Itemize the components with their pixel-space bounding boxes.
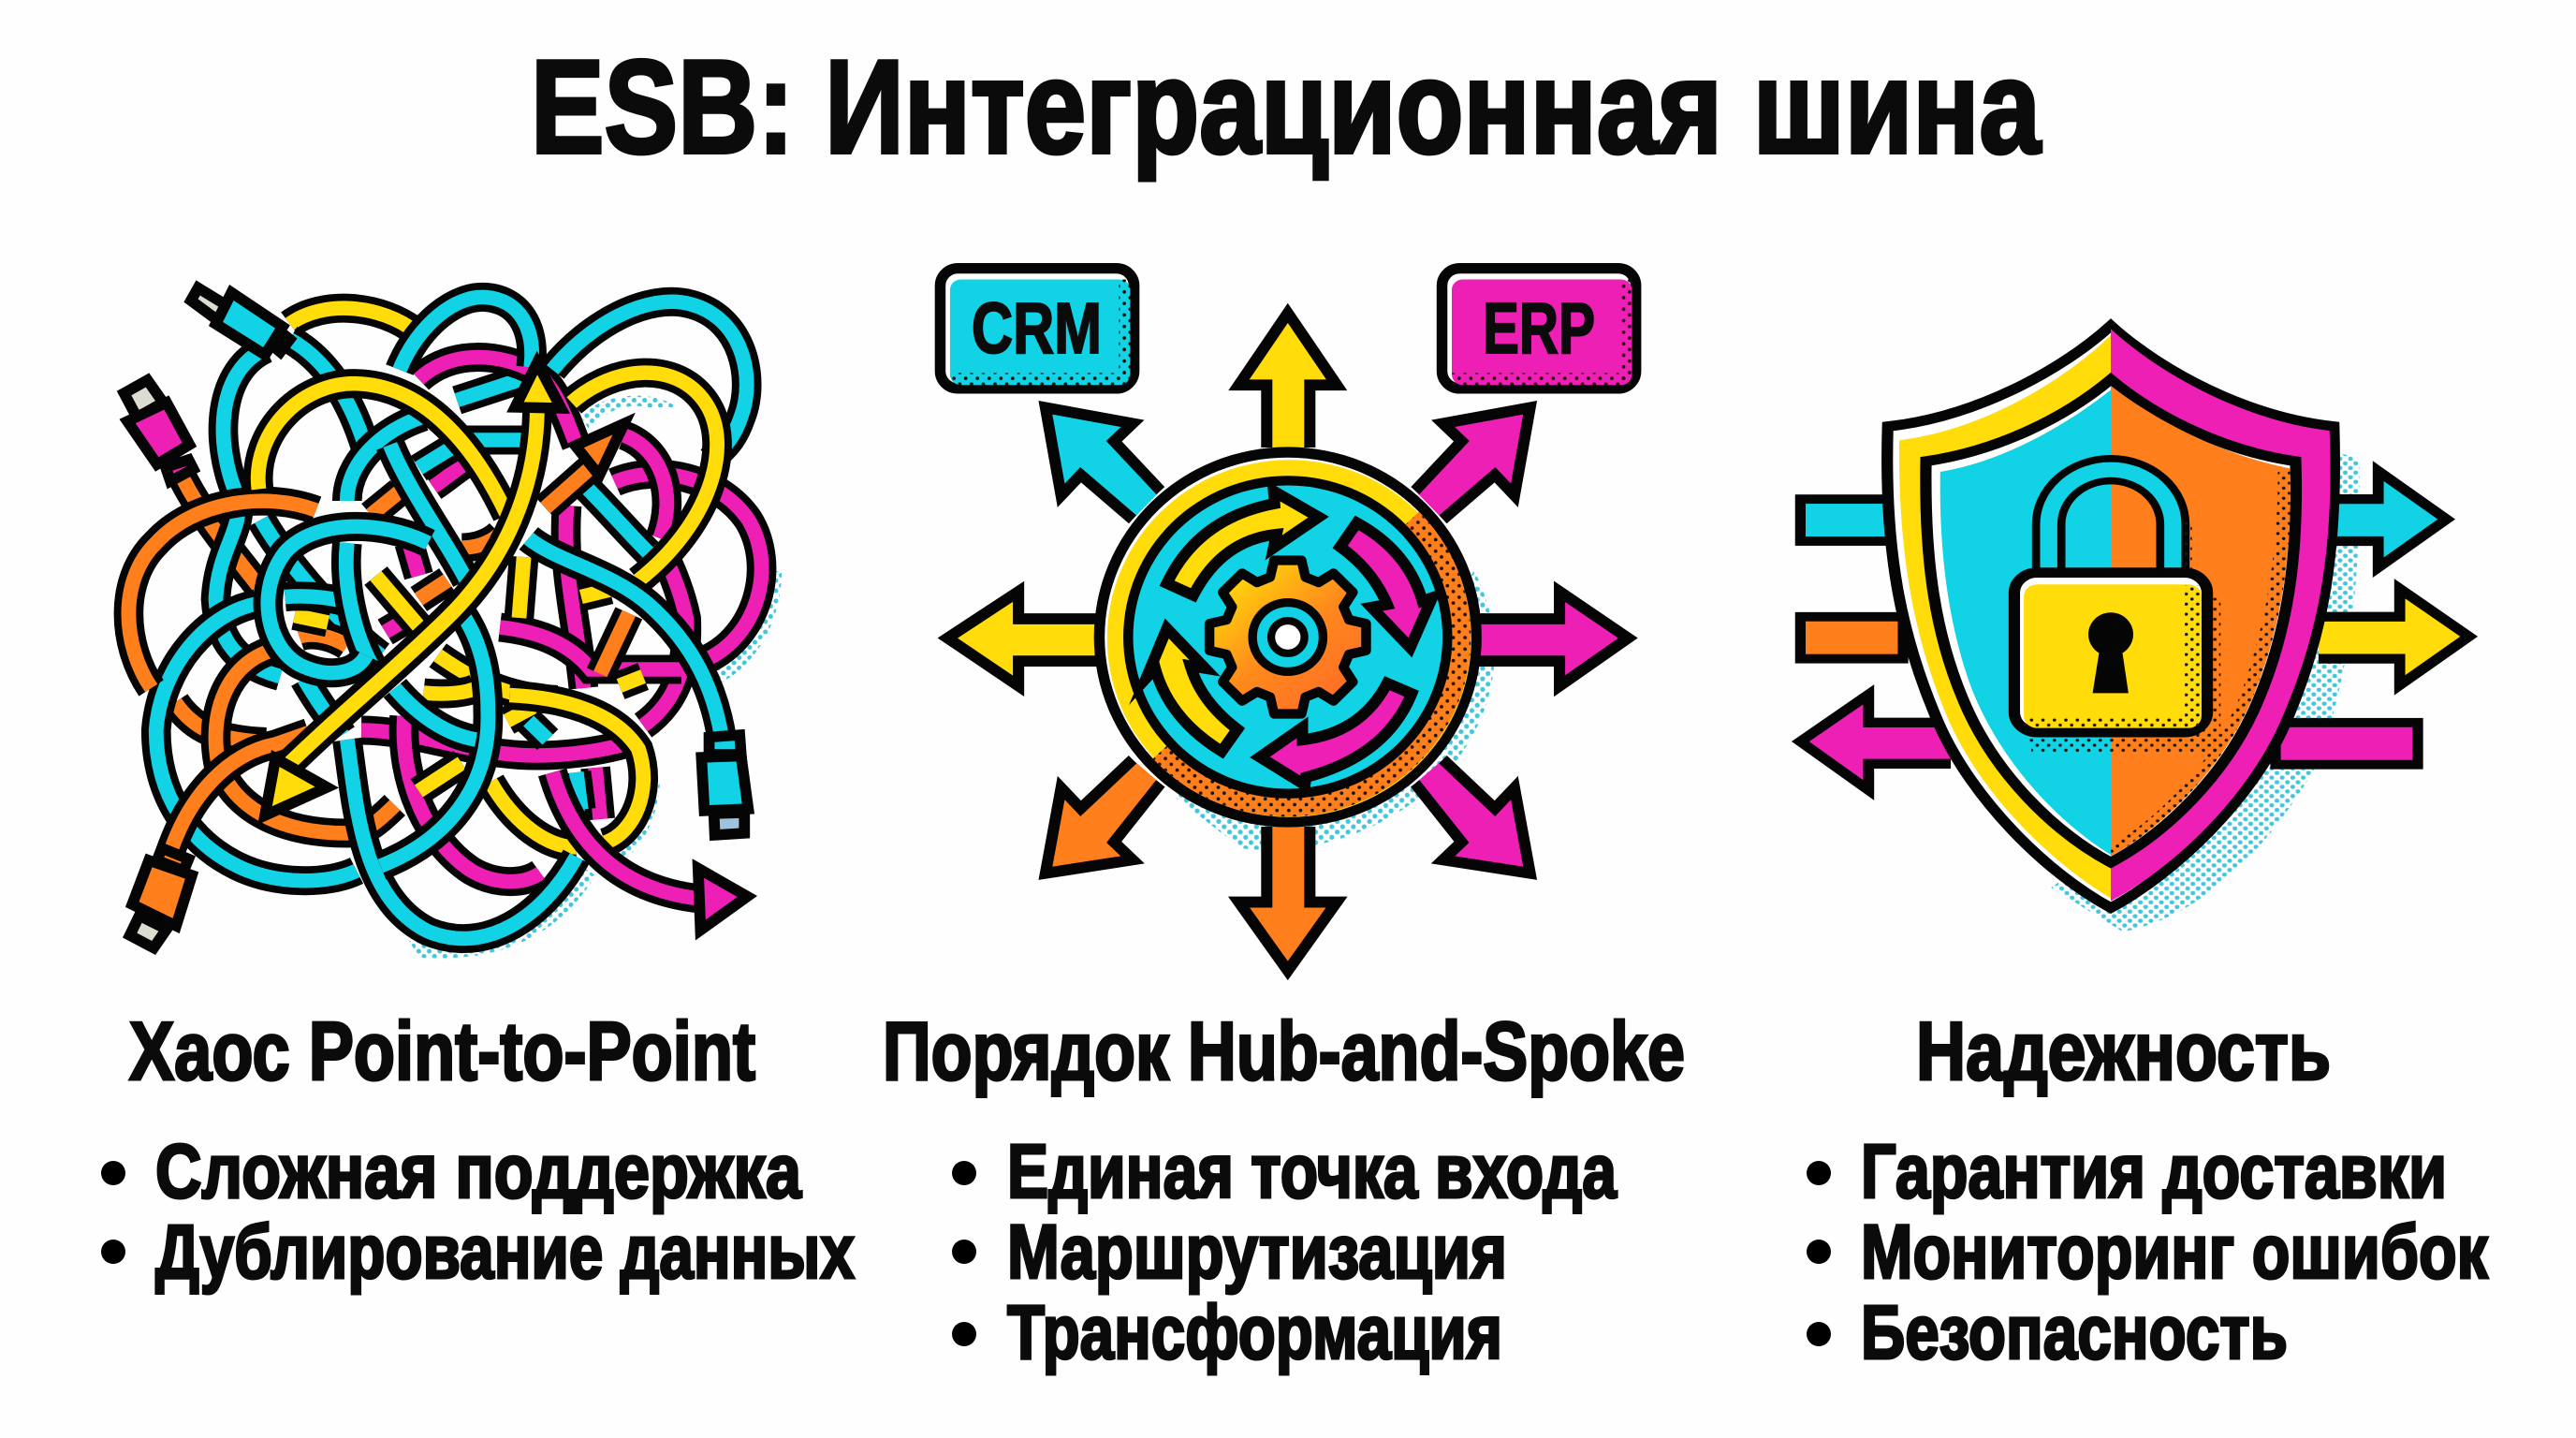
connector: pink left — [124, 380, 194, 481]
arrow: cyan right — [2328, 471, 2447, 567]
bar: cyan left — [1800, 499, 1891, 541]
bar: orange left — [1800, 617, 1903, 659]
panel: hub-and-spoke illustration — [940, 269, 1636, 971]
hub ring — [1094, 447, 1482, 828]
connector: cyan top-left — [191, 288, 290, 355]
column 3 list: Гарантия доставки — [1861, 1129, 2447, 1214]
arrow: down-right — [1415, 759, 1530, 873]
halftone shadow — [1173, 570, 1495, 850]
gear — [1209, 560, 1366, 714]
column 1 list: Сложная поддержка — [155, 1129, 802, 1214]
column 2 list: Трансформация — [1007, 1290, 1502, 1375]
circular flow arrows — [1147, 492, 1432, 785]
arrow heads on cables — [265, 363, 747, 931]
title: ESB: Интеграционная шина — [531, 33, 2042, 182]
label: ERP: ERP — [1483, 288, 1595, 369]
panel: reliability shield illustration — [1800, 326, 2469, 932]
column 1 list: Дублирование данных — [155, 1210, 855, 1295]
halftone shadow — [2051, 453, 2360, 932]
shield inner — [1925, 379, 2296, 862]
arrow: down — [1238, 827, 1337, 971]
arrow: up — [1238, 313, 1337, 448]
column 1 list — [101, 1129, 855, 1295]
column 2 list: Маршрутизация — [1007, 1210, 1507, 1295]
panel: point-to-point chaos illustration — [124, 288, 782, 959]
arrow: pink left — [1800, 695, 1951, 790]
column 2 list: Единая точка входа — [1007, 1129, 1617, 1214]
box: CRM — [940, 269, 1134, 389]
connector: orange bottom-left — [130, 848, 192, 947]
padlock body — [2014, 573, 2207, 732]
arrow: yellow right — [2319, 589, 2469, 685]
connector: cyan bottom-right — [701, 735, 748, 835]
column 3 list — [1807, 1129, 2489, 1375]
column 2 list — [952, 1129, 1617, 1375]
padlock shackle — [2049, 470, 2192, 573]
arrow: up-left — [1046, 407, 1161, 520]
halftone shadow — [409, 396, 782, 959]
column 3 list: Безопасность — [1861, 1290, 2288, 1375]
column 2 heading: Порядок Hub-and-Spoke — [883, 1005, 1685, 1097]
bar: pink right — [2276, 723, 2418, 765]
arrow: up-right — [1415, 407, 1530, 520]
column 1 heading: Хаос Point-to-Point — [129, 1005, 755, 1097]
keyhole — [2088, 612, 2133, 693]
shield outer — [1887, 326, 2334, 908]
arrow: down-left — [1046, 759, 1161, 873]
arrow: right — [1475, 592, 1628, 686]
box: ERP — [1442, 269, 1636, 389]
column 3 heading: Надежность — [1916, 1005, 2331, 1097]
label: CRM: CRM — [972, 288, 1102, 369]
padlock shadow — [2027, 598, 2220, 754]
arrow: left — [947, 592, 1100, 686]
tangled cables — [128, 297, 762, 939]
